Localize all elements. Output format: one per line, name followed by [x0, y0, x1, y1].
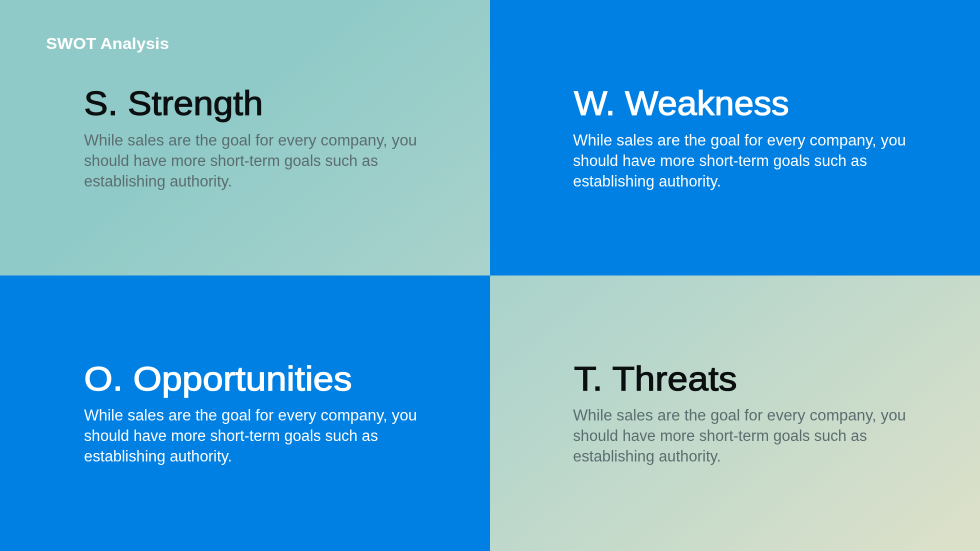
panel: weakness: [573, 85, 906, 190]
text block: weakness description: While sales are the goal for every company, you: [573, 132, 906, 150]
text block: threats description: should have more short-term goals such as: [573, 428, 867, 445]
title: SWOT Analysis: [46, 36, 169, 53]
text block: weakness description: [573, 132, 906, 190]
panel: strength: [84, 85, 417, 190]
heading: opportunities: O. Opportunities: [84, 360, 352, 398]
text block: weakness description: establishing authority.: [573, 174, 721, 190]
text block: opportunities description: While sales are the goal for every company, you: [84, 408, 417, 424]
panel: opportunities: [84, 360, 417, 466]
panel: threats: [573, 360, 906, 466]
text block: opportunities description: should have more short-term goals such as: [84, 428, 378, 445]
heading: weakness: W. Weakness: [574, 85, 789, 123]
text block: strength description: should have more short-term goals such as: [84, 153, 378, 170]
text block: strength description: While sales are the goal for every company, you: [84, 132, 417, 150]
panel: opportunities blue background: [0, 276, 490, 551]
heading: threats: T. Threats: [574, 360, 737, 398]
heading: strength: S. Strength: [84, 85, 263, 123]
text block: opportunities description: establishing authority.: [84, 448, 232, 466]
panel: weakness blue background: [490, 0, 980, 276]
text block: threats description: [573, 408, 906, 466]
text block: opportunities description: [84, 408, 417, 466]
text block: threats description: While sales are the goal for every company, you: [573, 408, 906, 424]
text block: weakness description: should have more short-term goals such as: [573, 153, 867, 170]
text block: strength description: establishing authority.: [84, 174, 232, 190]
text block: threats description: establishing authority.: [573, 448, 721, 466]
text block: strength description: [84, 132, 417, 190]
